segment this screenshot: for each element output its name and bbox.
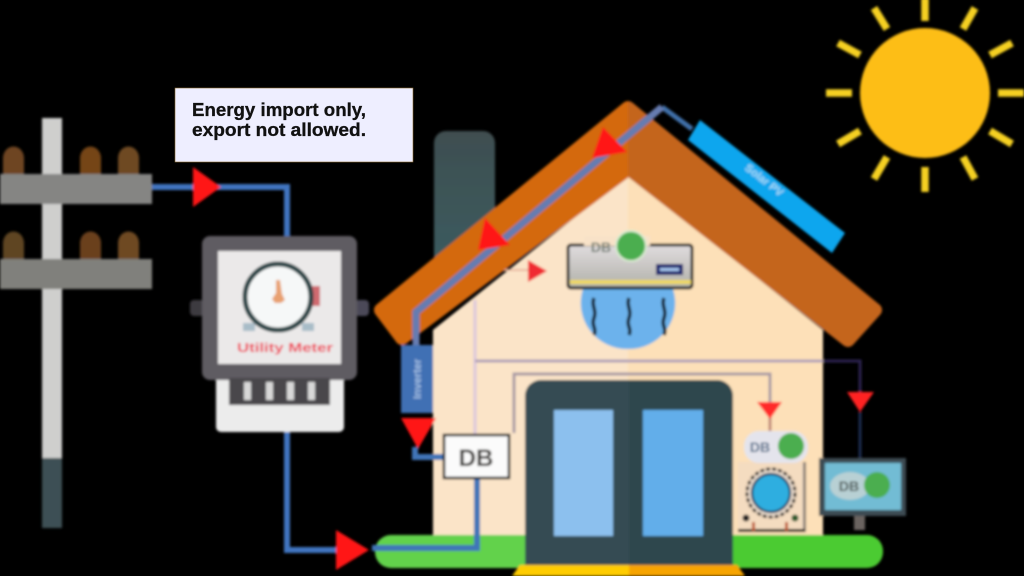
wire: pole to meter (152, 187, 287, 238)
utility pole (0, 118, 152, 528)
chimney (434, 131, 495, 271)
television: DB (839, 478, 859, 494)
utility meter: Utility Meter (237, 340, 333, 355)
utility meter (190, 236, 369, 432)
wire: DB to grid connection (372, 478, 477, 548)
solar panel: Solar PV (742, 162, 786, 200)
arrow: inverter to DB (401, 418, 436, 449)
callout: energy import note: export not allowed. (192, 120, 366, 140)
roof (381, 108, 875, 340)
arrow: to television (847, 392, 874, 412)
washing machine: DB (750, 439, 770, 455)
arrow: grid to meter (193, 167, 221, 207)
interior wiring (475, 270, 860, 458)
washing machine (738, 431, 808, 532)
arrow: to air conditioner (528, 260, 547, 282)
distribution board: DB (459, 445, 493, 472)
callout: energy import note: Energy import only, (192, 100, 366, 120)
arrow: to washing machine (757, 402, 782, 419)
distribution board (444, 435, 509, 478)
air conditioner (568, 231, 692, 349)
callout: energy import note (175, 88, 413, 162)
door (525, 380, 733, 565)
arrow: roof top (592, 127, 627, 158)
television (819, 458, 906, 530)
wire: inverter to DB (415, 447, 445, 457)
arrow: roof middle (478, 218, 510, 250)
inverter (401, 345, 433, 413)
house walls (433, 175, 823, 540)
inverter: Inverter (412, 358, 424, 399)
sun (826, 0, 1024, 192)
ground (375, 535, 883, 568)
air conditioner: DB (591, 239, 611, 255)
wire: panel to inverter (416, 107, 662, 346)
arrow: meter to house (336, 530, 369, 570)
solar panel (662, 107, 845, 253)
wire: meter to DB (287, 432, 340, 550)
door step (512, 565, 745, 576)
